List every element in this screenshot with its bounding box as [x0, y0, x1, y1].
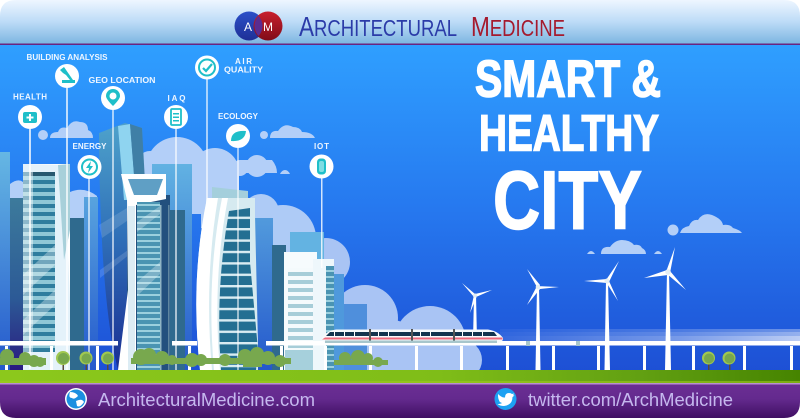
pin: air quality: QUALITY [224, 66, 264, 74]
main cloud [136, 137, 277, 228]
title: HEALTHY [479, 104, 659, 162]
tower 3 [196, 187, 258, 370]
title: SMART & [475, 50, 661, 108]
brand name: ARCHITECTURAL [299, 11, 457, 42]
tree [80, 352, 92, 370]
tree [56, 351, 70, 370]
background buildings [0, 123, 367, 370]
pin: ecology [218, 112, 259, 370]
sensor pins [13, 53, 334, 370]
title: CITY [493, 154, 642, 246]
icon: globe [65, 388, 87, 410]
clouds behind city [10, 137, 482, 380]
cloud behind tower 4 and train [324, 238, 482, 370]
logo: AM circles: A [244, 20, 252, 34]
bush right [334, 350, 388, 367]
sky background [0, 45, 800, 375]
ground [0, 370, 800, 383]
pin: IoT: IOT [314, 142, 329, 151]
pin: IAQ [164, 94, 188, 370]
elevated rail track [0, 341, 800, 370]
bush centre [131, 347, 291, 367]
tower 4 [284, 252, 334, 370]
pin: energy [72, 142, 107, 370]
pin: energy: ENERGY [72, 142, 107, 151]
cloud small by ecology [280, 170, 290, 174]
website link: ArchitecturalMedicine.com [98, 389, 315, 410]
small clouds [38, 121, 742, 254]
turbine 1 [462, 283, 492, 330]
cloud right of curved tower [250, 194, 316, 252]
twitter link: twitter.com/ArchMedicine [528, 389, 733, 410]
pin: health: HEALTH [13, 92, 47, 102]
turbine 3 [584, 261, 619, 370]
pin: building analysis [26, 53, 108, 370]
icon: twitter [494, 388, 516, 410]
maglev train [322, 329, 503, 343]
speed trail [500, 329, 800, 341]
pin: air quality: AIR [235, 57, 252, 66]
tree [702, 352, 715, 370]
bush left [0, 349, 46, 367]
header band [0, 0, 800, 45]
tower 2 [118, 174, 170, 370]
pin: geo location [88, 76, 156, 370]
trees [56, 351, 736, 370]
logo: AM circles [234, 12, 282, 40]
tree [722, 352, 736, 370]
pin: health [13, 92, 47, 369]
brand name [299, 17, 564, 36]
logo: AM circles: M [263, 20, 273, 34]
turbine 4 [644, 247, 686, 370]
tower 1 [23, 164, 70, 370]
footer band [0, 383, 800, 418]
wind turbines [462, 247, 686, 370]
pin: ecology: ECOLOGY [218, 112, 259, 121]
tree [101, 352, 114, 370]
pin: building analysis: BUILDING ANALYSIS [26, 53, 108, 62]
pin: IoT [310, 142, 334, 268]
bushes [0, 347, 388, 367]
pin: geo location: GEO LOCATION [88, 76, 156, 85]
title [475, 50, 661, 246]
pin: air quality [195, 56, 263, 202]
cloud lower right [587, 240, 662, 254]
turbine 2 [527, 269, 559, 370]
cloud mid [260, 125, 315, 139]
low left cloud patches [10, 180, 97, 222]
pin: IAQ: IAQ [168, 94, 186, 103]
brand name: MEDICINE [471, 11, 565, 42]
cloud left [38, 121, 93, 140]
cloud upper right [668, 214, 742, 236]
